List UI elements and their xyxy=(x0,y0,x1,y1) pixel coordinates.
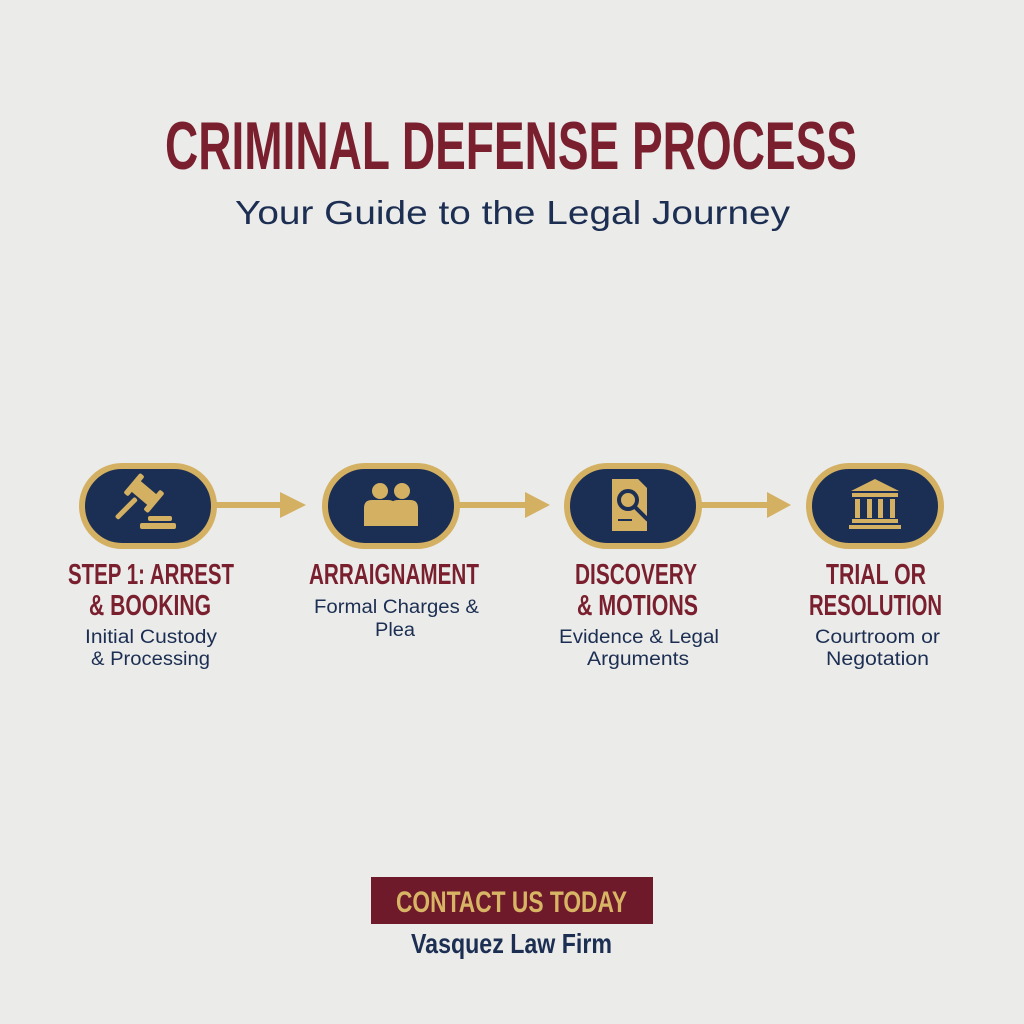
arrow 2 xyxy=(455,492,550,518)
contact button: CONTACT US TODAY xyxy=(396,886,627,919)
arrow 1 xyxy=(212,492,306,518)
step 4 pill: courthouse xyxy=(809,466,941,546)
arrow 3 xyxy=(697,492,791,518)
step 4 text xyxy=(809,559,942,670)
firm name: Vasquez Law Firm xyxy=(411,928,612,959)
step 1 pill: gavel xyxy=(82,466,214,546)
step 2 text: Plea xyxy=(375,620,415,641)
step 4 text: Negotation xyxy=(826,649,929,670)
step 2 text: Formal Charges & xyxy=(314,597,479,618)
step 1 text: & BOOKING xyxy=(89,590,211,622)
step 1 text xyxy=(68,559,234,670)
step 4 text: Courtroom or xyxy=(815,627,941,648)
step 3 text: Arguments xyxy=(587,649,689,670)
step 3 pill: document search xyxy=(567,466,699,546)
step 2 pill: people xyxy=(325,466,457,546)
step 1 text: & Processing xyxy=(91,649,210,670)
step 3 text: & MOTIONS xyxy=(577,590,698,622)
step 1 text: Initial Custody xyxy=(85,627,218,648)
step 3 text xyxy=(559,559,719,670)
step 4 text: RESOLUTION xyxy=(809,590,942,622)
step 1 text: STEP 1: ARREST xyxy=(68,559,234,591)
step 3 text: Evidence & Legal xyxy=(559,627,719,648)
subtitle: Your Guide to the Legal Journey xyxy=(235,194,791,231)
contact button xyxy=(371,877,653,924)
step 2 text xyxy=(309,559,479,641)
step 3 text: DISCOVERY xyxy=(575,559,697,591)
step 4 text: TRIAL OR xyxy=(826,559,926,591)
step 2 text: ARRAIGNAMENT xyxy=(309,559,479,591)
